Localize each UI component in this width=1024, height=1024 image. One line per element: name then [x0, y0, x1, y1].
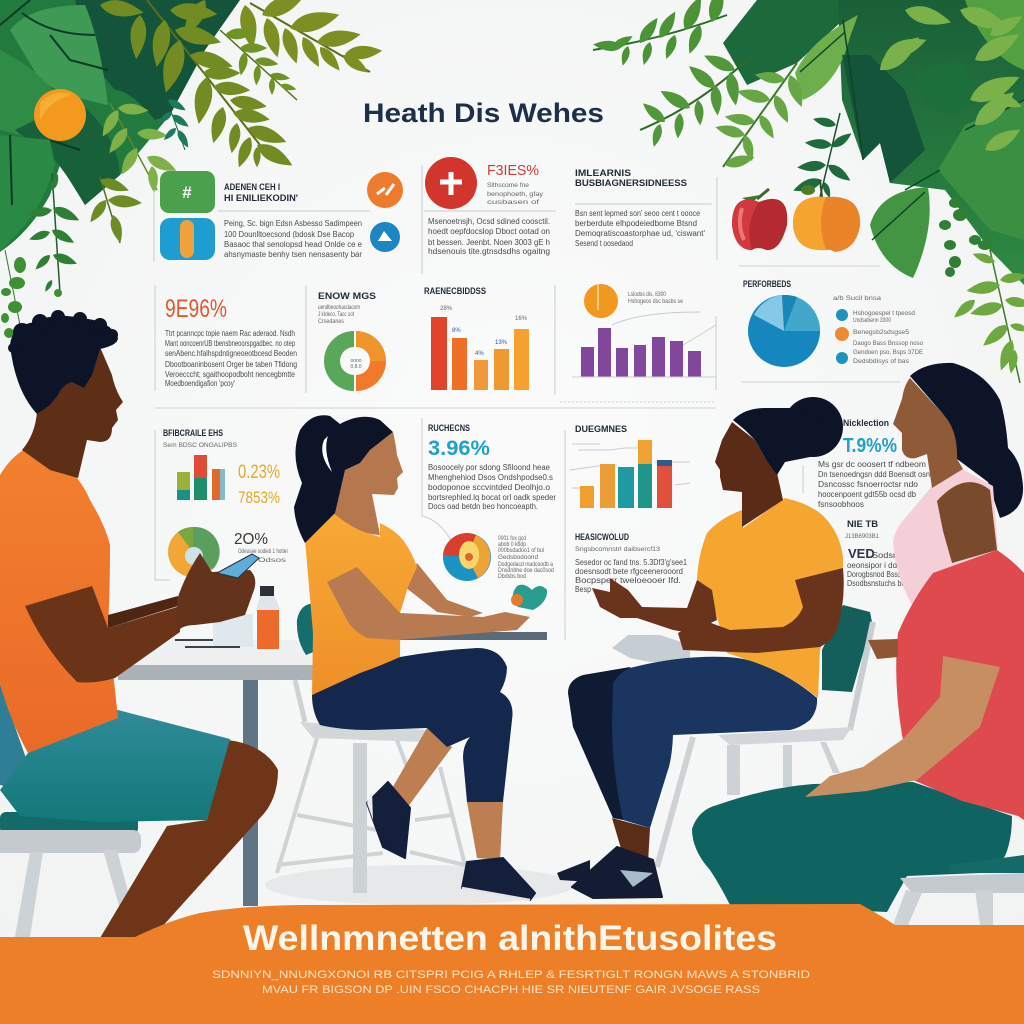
hand: [868, 639, 898, 659]
panel: blue stat and pie: [422, 418, 556, 610]
neck and face: [893, 378, 963, 488]
notes: [847, 551, 909, 588]
notes: [238, 549, 288, 564]
hair: [910, 363, 1023, 518]
table top: [400, 632, 547, 640]
notes: Odsos: [258, 558, 286, 564]
icon: peach: [793, 180, 860, 252]
icon: orange circle: [367, 172, 403, 208]
shoes: [557, 847, 662, 898]
icon: apple: [732, 189, 787, 250]
stat: F3IES%: [487, 162, 539, 179]
table: [118, 640, 316, 906]
body text: hoocenpoent gdt55b ocsd db: [818, 490, 917, 499]
chair: [657, 605, 873, 867]
arm: [327, 567, 530, 640]
notes: J kIdeco. Tacc sot: [318, 312, 354, 318]
heading: Nicklection: [843, 418, 889, 429]
notes: [628, 292, 684, 305]
panel: donut chart: [318, 291, 386, 391]
banner text: SDNNIYN_NNUNGXONOI RB CITSPRI PCIG A RHLEP & FESRTIGLT RONGN MAWS A STONBRID: [212, 969, 810, 981]
front shin: [467, 802, 503, 860]
notes: Dnsdnbhe doe dac0sod: [498, 568, 554, 574]
banner title: Wellnmnetten alnithEtusolites: [243, 919, 777, 958]
panel: red stat card: [422, 157, 556, 274]
body text: 100 Dounlltoecsond (bdosk Dse Bacop: [224, 230, 355, 239]
stat two: VED: [848, 546, 875, 561]
legend: Daogo Bass Bnssop noso: [853, 341, 924, 347]
panel: blue pie chart: [743, 279, 924, 367]
donut: [324, 331, 386, 391]
value labels: [440, 306, 528, 357]
body text: Moedboendigafion 'pcoy': [165, 379, 235, 388]
bottom banner: [0, 904, 1024, 1024]
pie: [748, 295, 820, 367]
icon: blue circle: [370, 222, 400, 252]
pink top: [893, 469, 998, 607]
right arm: [678, 568, 844, 653]
shin: [612, 818, 650, 863]
notes: Lslodos dis, 8300: [628, 292, 667, 298]
stat notes: Slthscome fne: [487, 183, 530, 189]
foliage: top right: [593, 0, 1024, 383]
panel: mini chart and ring: [155, 428, 288, 580]
panel: right side text: [803, 418, 930, 588]
shirt: [0, 449, 118, 753]
stat two: 7853%: [238, 488, 280, 507]
notes: [498, 536, 554, 580]
green pants: [692, 782, 1012, 912]
chair: [0, 684, 141, 937]
panel: percent stat: [155, 285, 306, 393]
stat: 3.96%: [428, 437, 490, 460]
donut: oooo: [350, 358, 362, 364]
value labels: 8%: [452, 328, 461, 334]
body text: hdsenouis tite.gtnsdsdhs ogaitng: [428, 247, 550, 256]
heading: ADENEN CEH I: [224, 182, 280, 193]
bars: [581, 328, 701, 377]
heading: IMLEARNIS: [575, 168, 631, 179]
legend: Dedsbdisys of bas: [853, 359, 909, 365]
body text: Ttrt pcanncpc topie naem Rac aderaod. Nsdh: [165, 329, 295, 338]
body text: Msenoetnsjh, Ocsd sdined coosctil.: [428, 217, 550, 226]
hair: [8, 310, 118, 414]
person: woman in center: [277, 415, 547, 900]
front leg: [612, 657, 817, 828]
panel: multicolor bars: [565, 424, 690, 640]
shirt: [305, 513, 417, 695]
stat notes: [487, 183, 543, 206]
body text: bodoponoe sccvintded Deolhjo.o: [428, 483, 551, 492]
notes: Odeusee sodieb 1 hotter: [238, 549, 288, 555]
body text: [428, 217, 550, 256]
icon: red plus circle: [425, 157, 477, 209]
body text: Dsncossc fsnoerroctsr ndo: [818, 480, 919, 489]
hair and bun: [733, 397, 843, 475]
notes: Gedsbodoond: [498, 555, 538, 561]
body text: [575, 558, 687, 594]
notes: abob 0 kbdp: [498, 542, 527, 548]
notes: 0001 fox gcd: [498, 536, 526, 542]
title: Heath Dis Wehes: [363, 98, 604, 128]
leggings: [312, 648, 512, 802]
notes: Dbdsbs bod: [498, 574, 526, 580]
stat notes: cusbasen of: [487, 200, 540, 206]
stat three: 2O%: [234, 531, 268, 548]
body text: [428, 463, 556, 511]
notes: 000bsdadoo1 of bul: [498, 548, 544, 554]
back arm: [108, 596, 178, 628]
body text: Veroecccht; sgaithoopodboht nencegbmtte: [165, 370, 295, 379]
heading two: HEASICWOLUD: [575, 532, 629, 543]
body text: Dn tsenoedngsn ddd Boensdt osn: [818, 470, 930, 479]
notes: [318, 305, 360, 325]
chair: [893, 700, 1024, 925]
stat: 9E96%: [165, 295, 227, 323]
panel: purple bar chart: [572, 284, 716, 390]
icon: green square: #: [182, 183, 192, 202]
icon: green square: [160, 171, 215, 213]
shoulder: [937, 482, 997, 563]
panel: orange bar chart: [424, 285, 555, 395]
heading line two: HI ENILIEKODIN': [224, 193, 298, 204]
body text: ahsnymaste benhy tsen nensasenty bar: [224, 250, 362, 259]
left arm and hand: [592, 578, 717, 633]
legend: Hshogoespel t tpeosd: [853, 311, 915, 317]
body text: [165, 329, 297, 388]
body text: Sesedor oc fand tns. 5.3Df3'g'see1: [575, 558, 687, 567]
notes: oeonsipor i dd: [847, 561, 897, 570]
body text: Bosoocely por sdong Sfiloond heae: [428, 463, 551, 472]
neck and face: [333, 432, 403, 535]
body text: senAbenc.hfalhspdntigneoeotbcesd Beoden: [165, 349, 297, 358]
heading two: NIE TB: [847, 519, 878, 530]
shorts: [0, 710, 230, 822]
heading: PERFORBEDS: [743, 279, 791, 290]
icon: blue square with capsule: [160, 218, 215, 260]
bowl: [612, 635, 690, 663]
donut: 0.8.0: [350, 364, 362, 370]
icon: orange circle: [584, 284, 618, 318]
subheading: J13B6903B1: [845, 534, 880, 540]
red shirt: [896, 550, 1024, 820]
body text: Peing, Sc. bign Edsn Asbesso Sadimpeen: [224, 219, 362, 228]
front shoe: [462, 858, 535, 900]
back leg: [568, 667, 650, 820]
floor shadow: [265, 865, 575, 905]
banner text: MVAU FR BIGSON DP .UIN FSCO CHACPH HIE SR NIEUTENF GAIR JVSOGE RASS: [262, 984, 760, 996]
body text: Mhenghehiod Dsos Ondshpodse0.s: [428, 473, 553, 482]
legend: Gendoen pso, Bsps 37DE: [853, 350, 923, 356]
body text: Ms gsr dc ooosert tf ndbeom: [818, 460, 926, 469]
heading: DUEGMNES: [575, 424, 627, 435]
panel: learning card: [575, 168, 717, 260]
notes: Sodsr: [872, 551, 896, 560]
value labels: 4%: [475, 351, 484, 357]
body text: Demoqratiscoastorphae ud, 'ciswant': [575, 229, 705, 238]
body text: doesnsodt bete rfgceenerooord: [575, 567, 683, 576]
body text: Mant ooncoenrUB tbensbneoorspgadbec. no otep: [165, 339, 295, 348]
neck and face: [715, 422, 783, 527]
notes: Dsodbsnstuchs boc: [847, 579, 909, 588]
panel: top left health card: [154, 171, 403, 262]
person: woman on far right: [692, 363, 1024, 925]
foliage: top left: [0, 0, 383, 338]
notes: Hshogeos dsc basbs se: [628, 299, 684, 305]
heading: ENOW MGS: [318, 291, 376, 302]
neck and face: [22, 347, 123, 478]
back shoe: [367, 782, 410, 858]
stat notes: benophoeth, gfay: [487, 192, 543, 198]
body text: Besp: [575, 585, 591, 594]
glass and bottle: [175, 586, 279, 649]
body text: Sesend t oosedaod: [575, 239, 633, 248]
value labels: 13%: [495, 340, 508, 346]
ring chart: [168, 527, 220, 577]
phone: [217, 554, 259, 578]
body text: Docs oad betdn beo honcoeapth.: [428, 502, 538, 511]
legend: [833, 296, 924, 365]
heading line two: BUSBIAGNERSIDNEESS: [575, 178, 687, 189]
body text: [818, 460, 930, 509]
second arm: [405, 563, 483, 617]
stacked bars: [580, 440, 672, 508]
subheading: Sngsbcomnstrl daibsercf13: [575, 547, 661, 553]
chair: [277, 603, 465, 893]
subheading: Sem BDSC ONGALIPBS: [163, 443, 237, 449]
arm: [25, 586, 180, 682]
shirt: [697, 498, 843, 698]
back leg: [387, 728, 452, 808]
notes: Dorogbsnod Bsssm: [847, 570, 907, 579]
hair: [294, 415, 393, 543]
body text: Bocpsperr tweloeooer Ifd.: [575, 576, 681, 585]
heading: RUCHECNS: [428, 423, 470, 434]
legend: Undsebenn 3300: [853, 318, 892, 324]
body text: bortsrephled.lq bocat orl oadk speder: [428, 493, 556, 502]
body text: hoedt oepfdocslop Dboct ootad on: [428, 227, 550, 236]
body text: bt bessen. Jeenbt. Noen 3003 gE h: [428, 238, 550, 247]
heading: RAENECBIDDSS: [424, 286, 486, 297]
notes: Crsedanes: [318, 319, 344, 325]
icon: orange fruit: [34, 89, 86, 141]
pie: [443, 533, 491, 581]
stat one: 0.23%: [238, 462, 280, 483]
arm: [805, 656, 1000, 797]
value labels: 28%: [440, 306, 453, 312]
notes: uendbeoohacdacom: [318, 305, 360, 311]
body text: [575, 209, 705, 248]
leg: [100, 740, 278, 938]
heading: BFIBCRAILE EHS: [163, 428, 223, 439]
bars: [431, 317, 529, 390]
legend: Benegsb2sdsgse5: [853, 330, 910, 336]
hand: [177, 553, 255, 632]
stat: T.9%%: [843, 435, 897, 457]
body text: [224, 219, 363, 259]
icon: teal heart: [511, 585, 547, 610]
body text: berberdute elhpodeiedbome Btsnd: [575, 219, 697, 228]
person: man on left: [0, 310, 278, 938]
body text: Basaoc thal senolopsd head Onlde ce e: [224, 240, 363, 249]
legend: a/b Sucil bnsa: [833, 296, 882, 302]
person: woman on right: [557, 397, 873, 898]
body text: fsnsoobhoos: [818, 500, 864, 509]
mini bars: [177, 455, 225, 500]
value labels: 16%: [515, 316, 528, 322]
body text: Bsn sent lepmed son' seoo cent t oooce: [575, 209, 700, 218]
notes: Dodgedacd madcoodb a: [498, 562, 554, 568]
body text: Dbootboaninbosent Orger be taben Tfidong: [165, 360, 297, 369]
banner text: [212, 969, 810, 996]
